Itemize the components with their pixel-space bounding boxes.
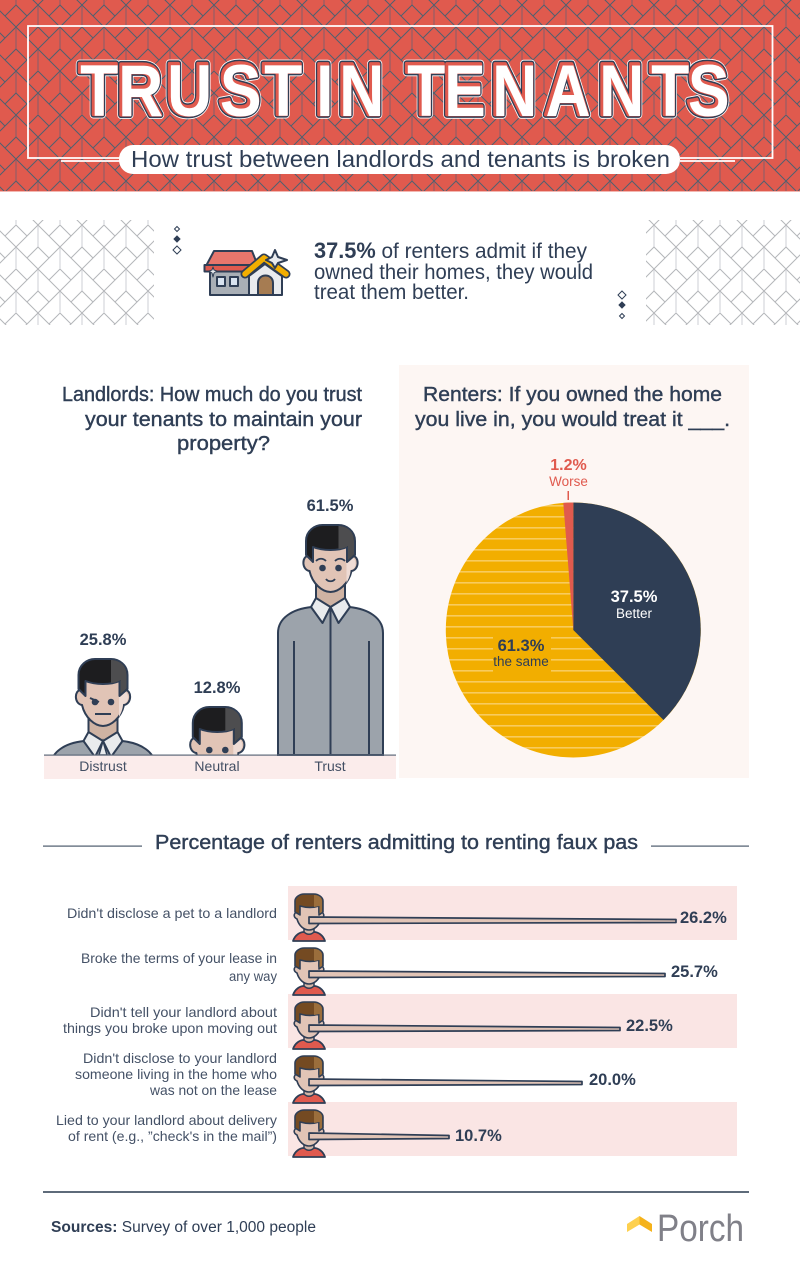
title	[79, 49, 730, 132]
heading: faux pas: Percentage of renters admitting to renting faux pas	[155, 832, 638, 854]
logo: porch	[627, 1208, 744, 1250]
title: TRUST	[80, 50, 302, 132]
bar values: 25.8%	[80, 631, 127, 649]
callout text: owned their homes, they would	[314, 261, 593, 284]
title: TRUST	[79, 49, 301, 131]
header banner	[0, 0, 800, 192]
title: TENANTS	[406, 49, 728, 131]
row 1 figure	[293, 894, 676, 941]
row values: 26.2%	[680, 909, 727, 927]
bar labels	[79, 758, 346, 774]
bar values	[80, 497, 354, 697]
row labels: of rent (e.g., ”check's in the mail”)	[68, 1128, 277, 1144]
bar values: 12.8%	[194, 679, 241, 697]
pie label: better: Better	[616, 606, 653, 621]
pie chart	[446, 491, 701, 758]
row labels	[56, 905, 277, 1144]
title: TRUST	[79, 49, 301, 131]
row stripes	[288, 886, 737, 1156]
sources: Sources: Survey of over 1,000 people	[51, 1219, 316, 1236]
heading: renters: Renters: If you owned the home	[423, 384, 722, 406]
pie label: same	[493, 637, 549, 669]
bar chart: landlord trust people	[44, 500, 396, 779]
panel: renters	[399, 365, 749, 778]
row 5 figure	[293, 1110, 449, 1157]
title: TENANTS	[406, 49, 728, 131]
pie label: same: 61.3%	[498, 637, 545, 655]
row labels: any way	[229, 968, 277, 984]
pie label: better	[611, 588, 658, 621]
row values: 20.0%	[589, 1071, 636, 1089]
bar labels: Distrust	[79, 758, 127, 774]
title: IN	[315, 49, 383, 131]
title: IN	[315, 49, 383, 131]
small diamonds left	[173, 226, 181, 254]
title: TRUST	[79, 49, 301, 131]
row 4 figure	[293, 1056, 582, 1103]
row labels: someone living in the home who	[75, 1066, 277, 1082]
title: TENANTS	[407, 50, 730, 132]
heading: renters	[415, 384, 730, 431]
pie label: better: 37.5%	[611, 588, 658, 606]
person: trust	[278, 525, 383, 755]
row labels: Broke the terms of your lease in	[81, 950, 277, 966]
row labels: Didn't tell your landlord about	[90, 1004, 277, 1020]
icon: house	[204, 250, 287, 295]
heading: landlords: Landlords: How much do you trust	[62, 384, 362, 406]
title: IN	[315, 49, 383, 131]
pie label: worse: Worse	[549, 474, 588, 489]
pie label: worse: 1.2%	[550, 457, 587, 474]
bar values: 61.5%	[307, 497, 354, 515]
pie label: same: the same	[493, 654, 549, 669]
logo: porch: Porch	[657, 1208, 744, 1250]
heading: renters: you live in, you would treat it ___.	[415, 409, 730, 431]
baseline band	[44, 755, 396, 779]
header frame	[28, 26, 772, 161]
row labels: Didn't disclose a pet to a landlord	[67, 905, 277, 921]
row labels: things you broke upon moving out	[63, 1020, 277, 1036]
row values: 22.5%	[626, 1017, 673, 1035]
callout text	[314, 238, 593, 304]
title: TENANTS	[406, 49, 728, 131]
person: neutral	[189, 706, 246, 754]
row 3 figure	[293, 1002, 620, 1049]
row values: 25.7%	[671, 963, 718, 981]
subtitle pill: How trust between landlords and tenants is broken	[131, 146, 670, 172]
pattern: right decoration	[646, 220, 800, 325]
row labels: Didn't disclose to your landlord	[83, 1050, 277, 1066]
row values: 10.7%	[455, 1127, 502, 1145]
pattern: left decoration	[0, 220, 154, 325]
title: IN	[316, 50, 384, 132]
pie label: worse	[549, 457, 588, 489]
heading: landlords	[62, 384, 362, 455]
callout text: 37.5% of renters admit if they	[314, 238, 587, 263]
small diamonds right	[618, 291, 626, 318]
heading: landlords: property?	[177, 433, 270, 455]
callout text: treat them better.	[314, 281, 469, 304]
bar labels: Trust	[314, 758, 346, 774]
row 2 figure	[293, 948, 665, 995]
person: distrust	[53, 658, 153, 754]
faux pas chart	[56, 886, 737, 1157]
heading: landlords: your tenants to maintain your	[85, 409, 362, 431]
row labels: Lied to your landlord about delivery	[56, 1112, 277, 1128]
row labels: was not on the lease	[149, 1082, 277, 1098]
row values	[455, 909, 727, 1145]
bar labels: Neutral	[194, 758, 240, 774]
footer rule	[43, 1191, 749, 1193]
